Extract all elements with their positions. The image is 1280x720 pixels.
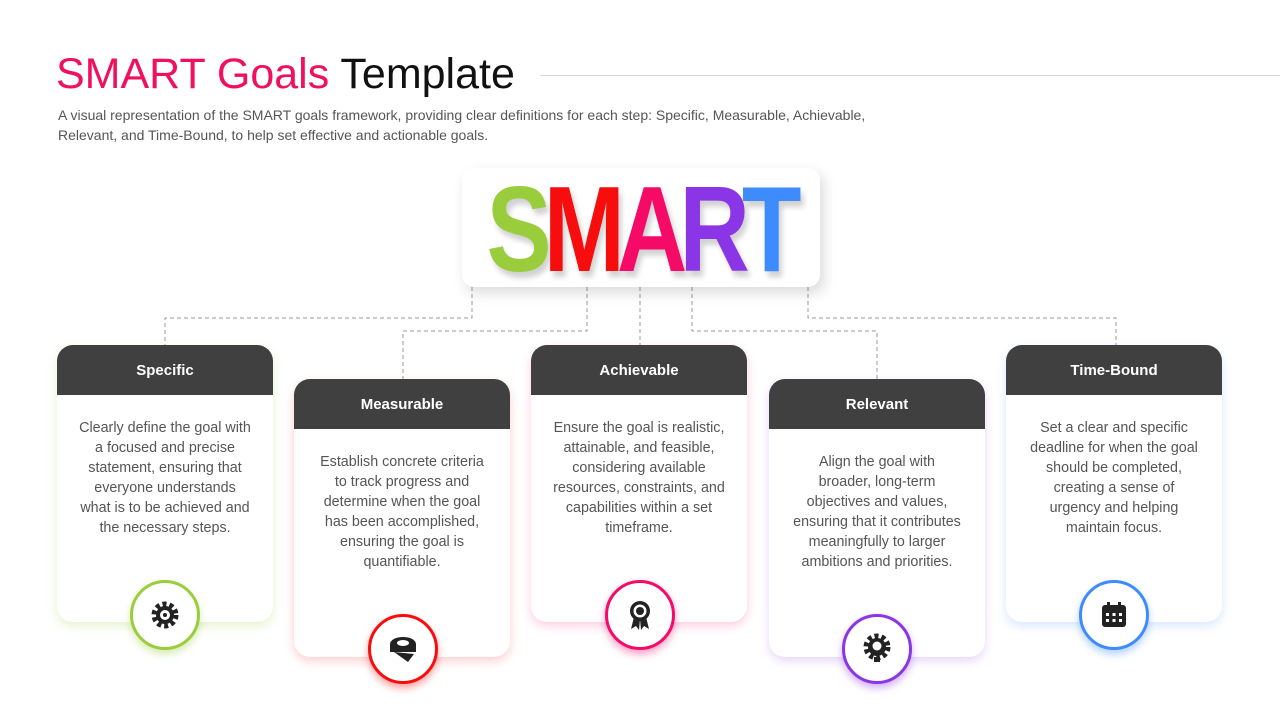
card: Relevant: Relevant (846, 396, 908, 413)
card: Measurable (294, 379, 510, 657)
card: Measurable: Establish concrete criteria to track progress and determine when the goal has been accomplished, ensuring the goal is quantifiable. (320, 454, 484, 570)
card: Time-Bound: Time-Bound (1070, 362, 1158, 379)
card: Specific: Clearly define the goal with a focused and precise statement, ensuring that everyone understands what is to be achieved and the necessary steps. (79, 420, 251, 536)
card: Specific: Specific (136, 362, 194, 379)
card: Relevant (769, 379, 985, 657)
icon: calendar (1079, 580, 1149, 650)
SMART logo box: SMART (486, 161, 794, 297)
card: Specific (57, 345, 273, 622)
icon: tape measure (368, 614, 438, 684)
subtitle: A visual representation of the SMART goals framework, providing clear definitions for each step: Specific, Measurable, Achievable, Relevant, and Time-Bound, to help set effective and actionable goals. (58, 107, 865, 143)
card: Time-Bound: Set a clear and specific deadline for when the goal should be completed, creating a sense of urgency and helping maintain focus. (1030, 420, 1198, 536)
title: SMART Goals Template (56, 50, 515, 98)
card: Achievable (531, 345, 747, 622)
icon: gear target (130, 580, 200, 650)
icon: gear bulb (842, 614, 912, 684)
card: Achievable: Achievable (599, 362, 679, 379)
card: Achievable: Ensure the goal is realistic, attainable, and feasible, considering available resources, constraints, and capabilities within a set timeframe. (553, 420, 725, 536)
card: Time-Bound (1006, 345, 1222, 622)
card: Measurable: Measurable (361, 396, 443, 413)
card: Relevant: Align the goal with broader, long-term objectives and values, ensuring that it contributes meaningfully to larger ambitions and priorities. (793, 454, 961, 570)
icon: award (605, 580, 675, 650)
